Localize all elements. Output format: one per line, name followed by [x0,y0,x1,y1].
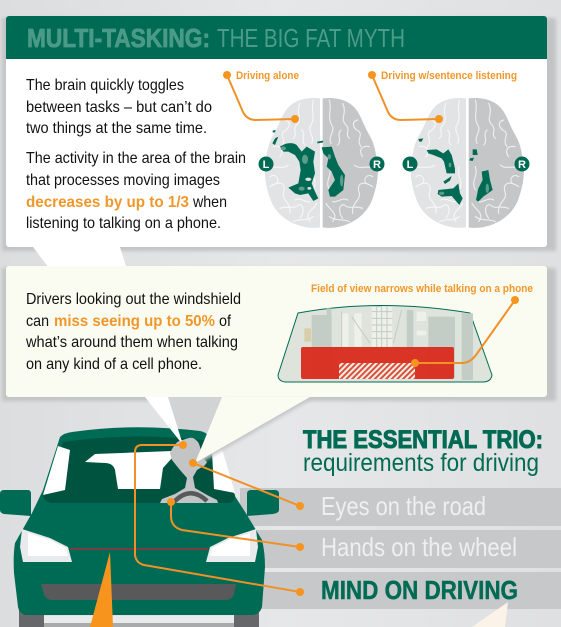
marker L: L [263,159,270,171]
text block: activity decreases [26,150,246,232]
grille [41,584,236,600]
road arrow [90,552,113,627]
pointer tail: bottom right [472,602,508,627]
windscreen [43,436,235,503]
side windows [43,446,235,495]
white pointer tip [145,397,183,445]
panel: field of view [6,266,547,397]
windshield illustration [278,306,492,382]
panel: brain activity [6,16,547,247]
callout line [411,296,519,367]
title: MULTI-TASKING: [27,23,210,53]
brain: driving with sentence listening [368,70,530,228]
text block: miss seeing: can [26,313,49,330]
callout line: hands on the wheel [167,498,304,551]
callout line [223,71,299,123]
trio item: hands: Hands on the wheel [321,532,517,562]
car [0,427,279,627]
text block: miss seeing: what’s around them when talking [25,334,238,351]
text block: brain toggles: The brain quickly toggles [26,77,184,94]
text block: miss seeing: Drivers looking out the windshield [26,291,241,308]
text block: activity decreases: when [192,194,227,211]
cream pointer tail [195,397,312,465]
text block: activity decreases: that processes moving images [26,172,220,189]
brain: driving alone [223,70,384,228]
callout line: mind on driving [135,441,304,596]
text block: activity decreases: decreases by up to 1/3 [26,194,189,211]
trio item: mind: MIND ON DRIVING [321,575,518,605]
text block: brain toggles [26,77,212,137]
label: Driving alone: Driving alone [236,70,299,82]
marker R [370,156,384,172]
text block: brain toggles: between tasks – but can’t do [26,99,212,116]
callout line [368,71,443,123]
marker R: R [518,159,526,171]
steering wheel [174,493,207,502]
body [14,427,265,615]
title: THE BIG FAT MYTH [217,23,405,53]
header bar [6,16,547,59]
marker L [402,156,418,172]
text block: brain toggles: two things at the same time. [26,120,207,137]
callout line: eyes on the road [189,459,304,510]
marker R [514,156,530,172]
text block: activity decreases: The activity in the area of the brain [26,150,246,167]
label: Driving w/sentence listening: Driving w/sentence listening [381,70,517,82]
text block: miss seeing: of [219,313,231,330]
text block: miss seeing: miss seeing up to 50% [54,313,215,330]
text block: miss seeing: on any kind of a cell phone. [26,356,202,373]
panel shadows [2,18,556,401]
marker L [258,156,274,172]
driver silhouette [160,438,218,503]
rear window [85,451,172,489]
heading: the essential trio: requirements for driving [303,449,539,477]
heading: the essential trio [303,426,543,477]
trio item: eyes: Eyes on the road [321,491,486,521]
text block: activity decreases: listening to talking on a phone. [26,215,221,232]
wheels [19,610,259,627]
road [44,616,234,623]
headlights [20,529,258,562]
callout tail: brain panel pointer [33,247,222,462]
marker R: R [373,159,381,171]
hood line [70,548,208,550]
marker L: L [407,159,414,171]
label: field of view: Field of view narrows while talking on a phone [311,283,533,295]
mirrors [0,490,279,516]
trio bars [240,488,561,609]
text block: miss seeing [25,291,241,373]
